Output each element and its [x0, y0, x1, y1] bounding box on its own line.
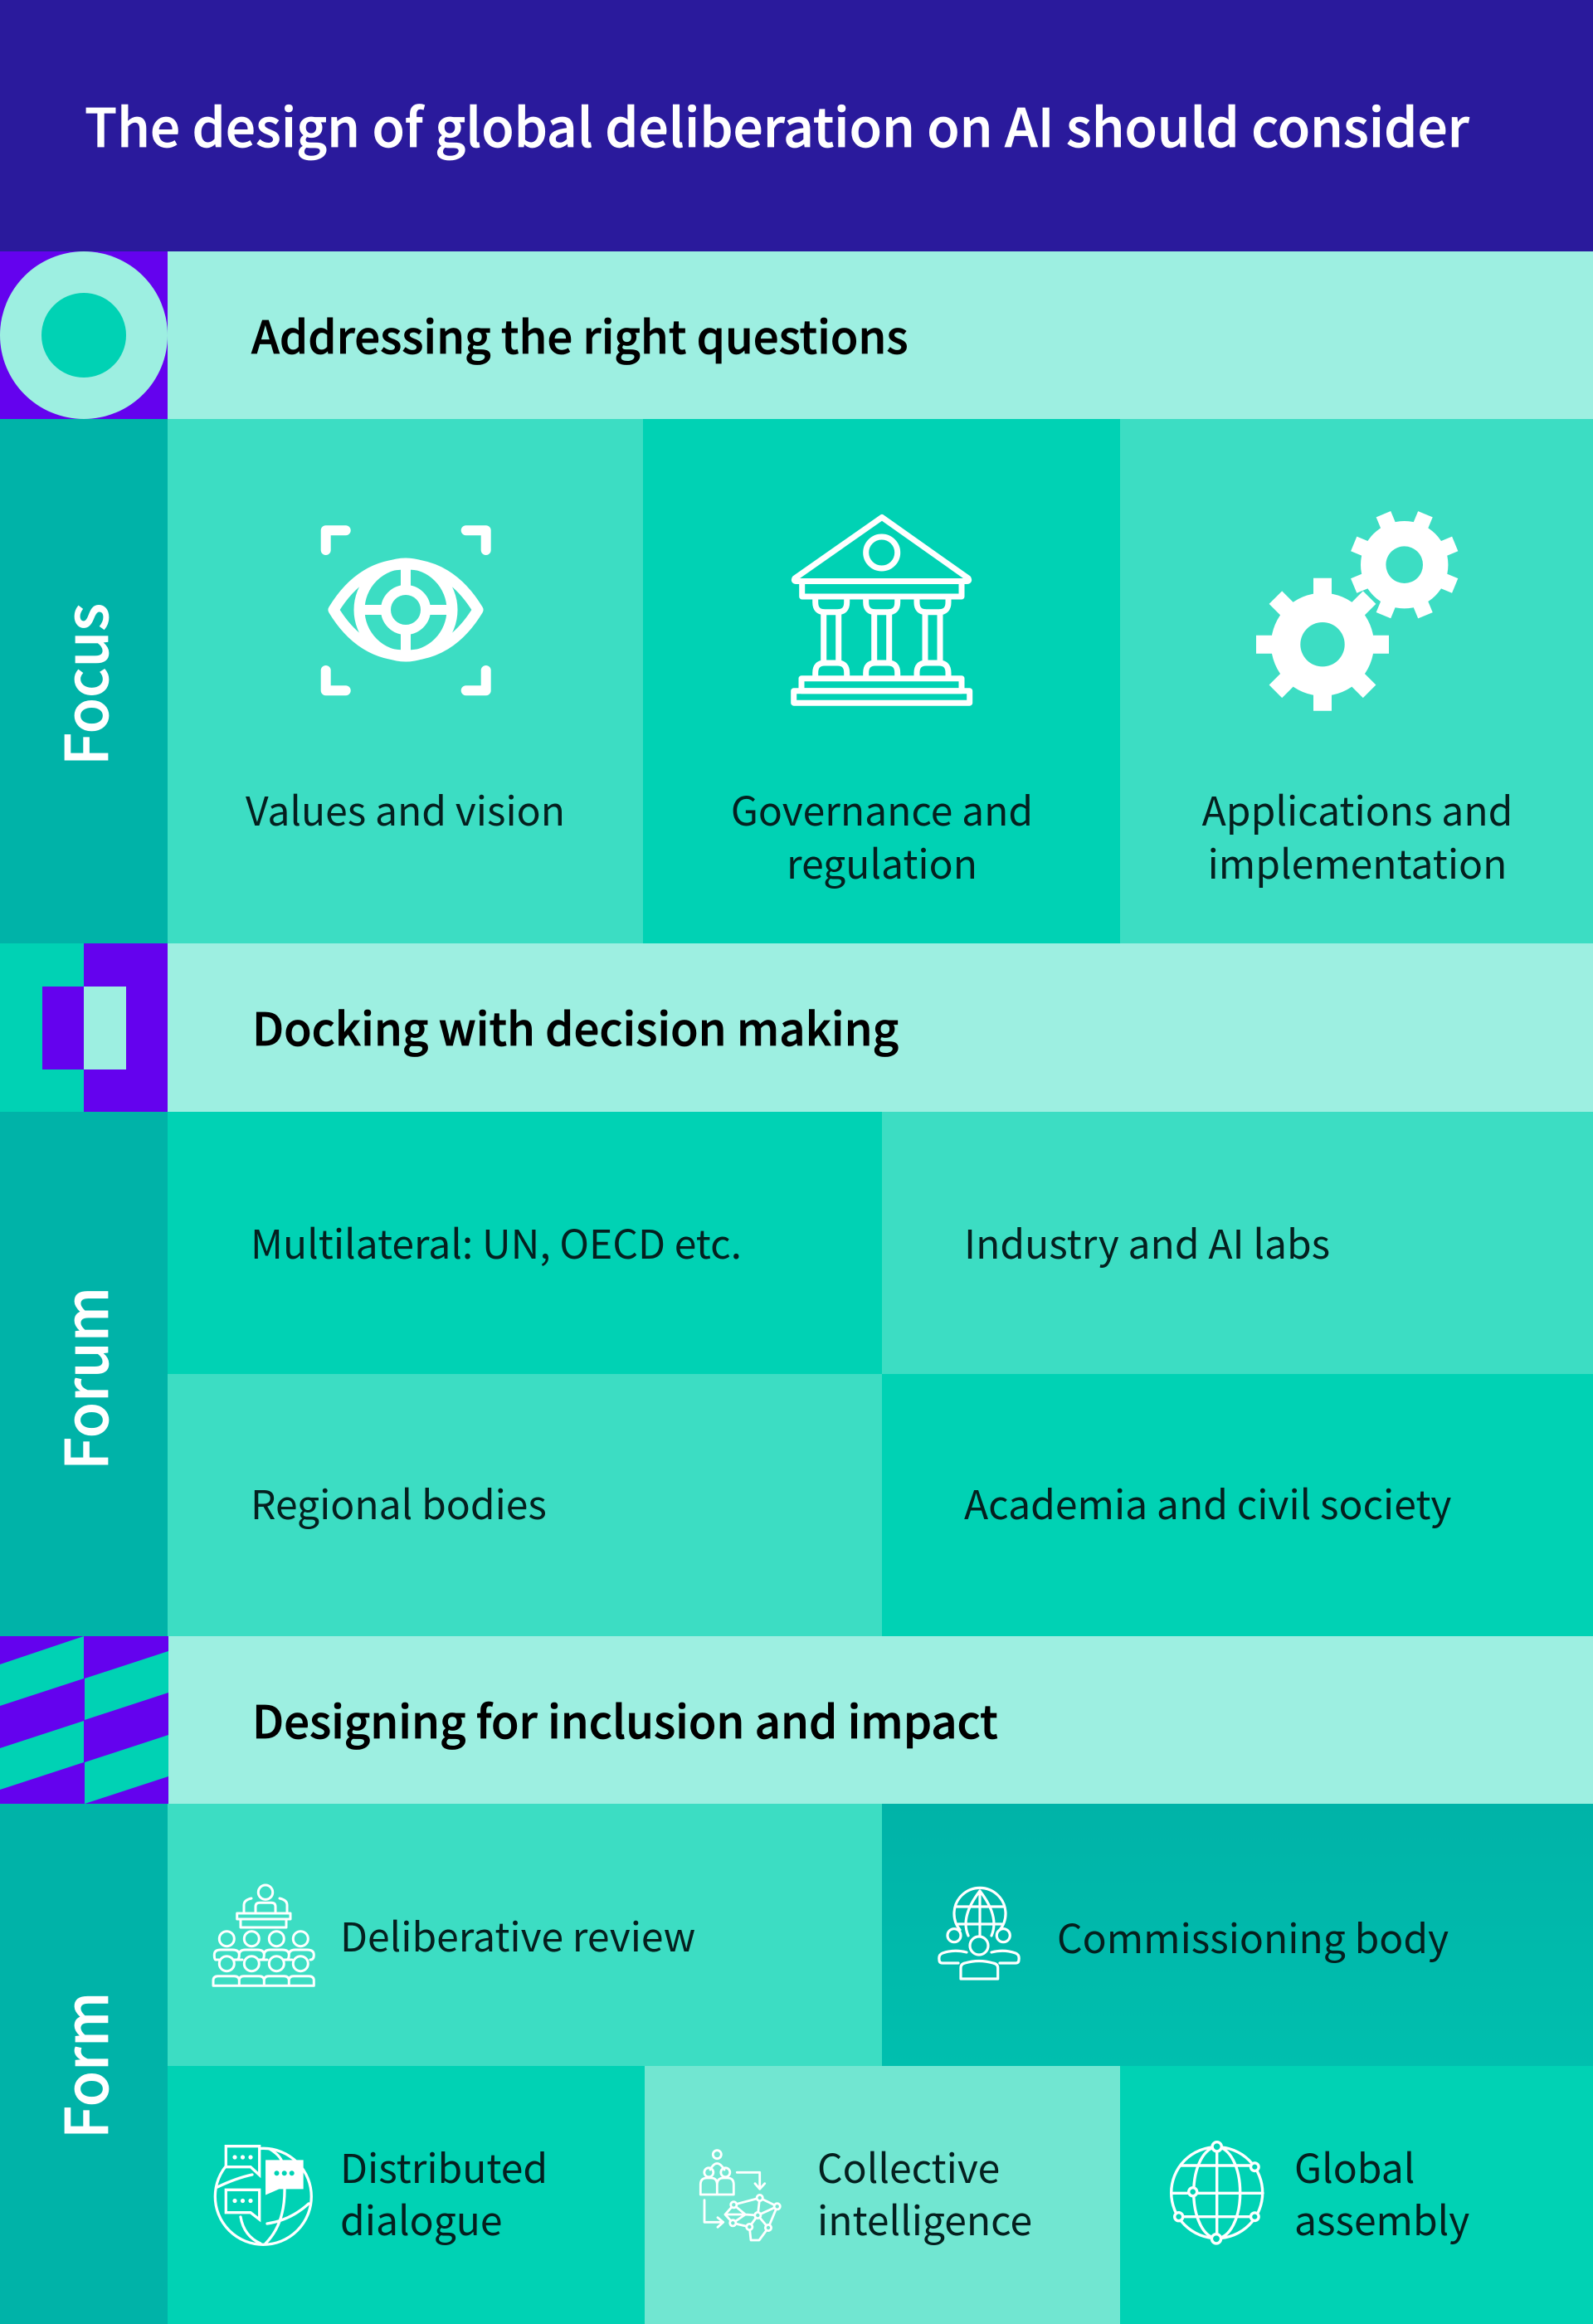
panel: regional bodies — [168, 1374, 882, 1636]
icon: slanted stripe tile — [0, 1636, 168, 1804]
panel: governance and regulation — [643, 419, 1120, 943]
icon: classical building — [794, 518, 970, 703]
icon: concentric circle tile — [0, 251, 168, 419]
panel: distributed dialogue: dialogue — [340, 2189, 503, 2247]
panel: academia and civil society — [882, 1374, 1593, 1636]
text: commissioning body: Commissioning body — [1057, 1907, 1449, 1965]
text: regional bodies: Regional bodies — [251, 1473, 547, 1531]
text: multilateral: Multilateral: UN, OECD etc. — [251, 1212, 742, 1270]
panel: global assembly — [1120, 2066, 1593, 2324]
panel: governance and regulation: regulation — [787, 832, 977, 890]
text: distributed dialogue: Distributed — [340, 2136, 548, 2195]
header band with title — [0, 0, 1593, 251]
label: form: Form — [41, 1992, 125, 2139]
panel: collective intelligence: intelligence — [817, 2189, 1032, 2247]
section bar: designing for inclusion and impact — [168, 1636, 1593, 1804]
icon: two gears — [1256, 493, 1476, 711]
heading: addressing the right questions: Addressing the right questions — [251, 301, 909, 367]
panel: multilateral — [168, 1112, 882, 1374]
panel: global assembly: assembly — [1294, 2189, 1469, 2247]
heading: designing for inclusion and impact: Designing for inclusion and impact — [252, 1686, 998, 1752]
panel: values and vision — [168, 419, 643, 943]
text: applications and implementation: Applications and — [1202, 779, 1513, 837]
panel: applications and implementation: implementation — [1208, 832, 1507, 890]
label: forum: Forum — [41, 1287, 125, 1470]
icon: globe with speech bubbles — [215, 2146, 311, 2244]
panel: collective intelligence — [645, 2066, 1120, 2324]
panel: commissioning body — [882, 1804, 1593, 2066]
text: collective intelligence: Collective — [817, 2136, 1000, 2195]
text: global assembly: Global — [1294, 2136, 1415, 2195]
text: academia and civil society: Academia and civil society — [964, 1473, 1451, 1531]
icon: eye with focus brackets — [326, 530, 486, 690]
text: governance and regulation: Governance and — [731, 779, 1033, 837]
sidebar: form — [0, 1804, 168, 2324]
section bar: docking with decision making — [168, 943, 1593, 1112]
panel: deliberative review — [168, 1804, 882, 2066]
panel: industry and AI labs — [882, 1112, 1593, 1374]
title: The design of global deliberation on AI should consider — [85, 86, 1470, 163]
icon: people to network — [700, 2151, 780, 2240]
panel: distributed dialogue — [168, 2066, 645, 2324]
text: deliberative review: Deliberative review — [340, 1905, 695, 1963]
text: values and vision: Values and vision — [246, 779, 565, 837]
icon: split square tile — [0, 943, 168, 1112]
icon: speaker and audience — [213, 1885, 314, 1985]
text: industry and AI labs: Industry and AI labs — [964, 1212, 1330, 1270]
section bar: addressing the right questions — [168, 251, 1593, 419]
label: focus: Focus — [41, 603, 125, 766]
icon: networked globe — [1172, 2142, 1263, 2244]
panel: applications and implementation — [1120, 419, 1593, 943]
icon: globe above people — [939, 1888, 1019, 1979]
heading: docking with decision making: Docking with decision making — [252, 993, 899, 1059]
sidebar: forum — [0, 1112, 168, 1636]
sidebar: focus — [0, 419, 168, 943]
